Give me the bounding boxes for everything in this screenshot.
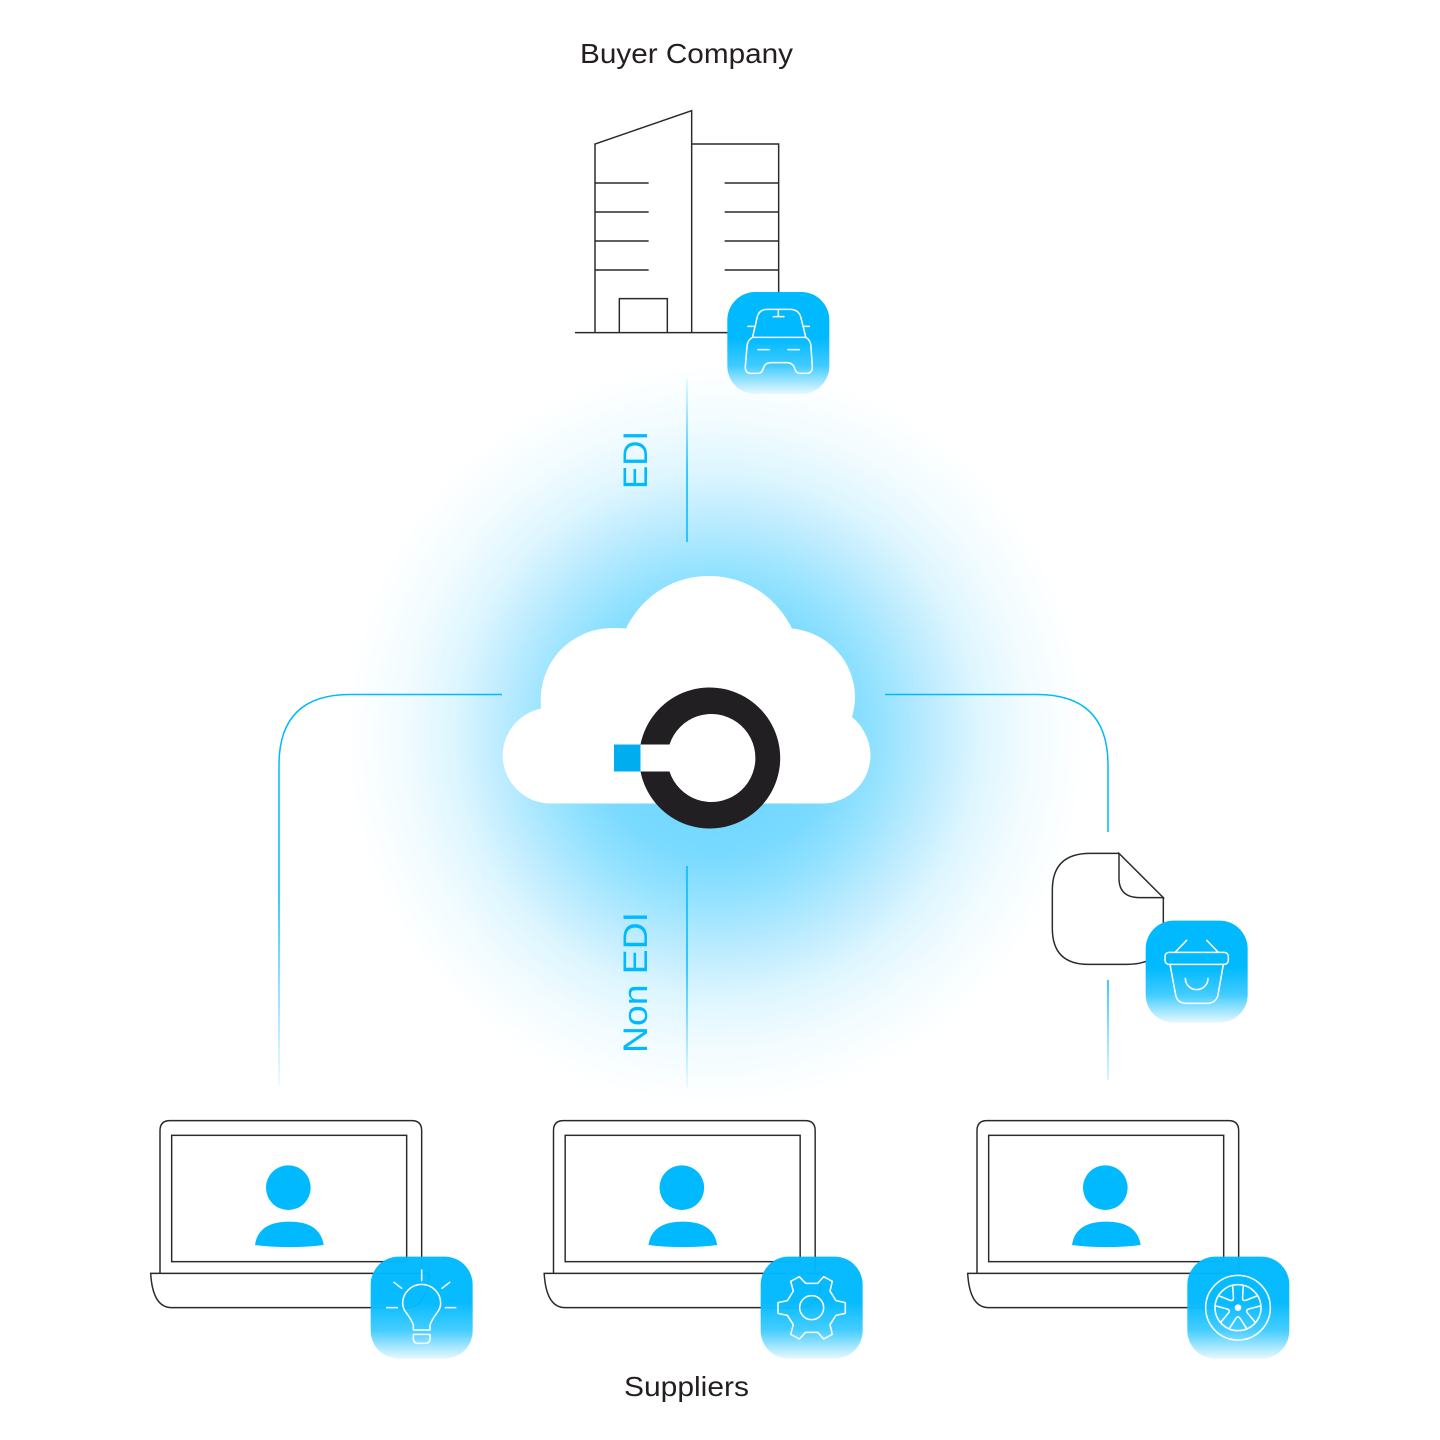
document icon: [1052, 853, 1163, 964]
badge: wheel: [1187, 1257, 1289, 1359]
cloud: [503, 576, 870, 804]
connector: cloud to left supplier: [279, 694, 502, 900]
badge: gear: [761, 1257, 863, 1359]
connector: document to right supplier: [1107, 980, 1109, 1080]
icon: buyer building: [575, 111, 779, 333]
laptop: centre supplier: [544, 1121, 823, 1308]
badge: light bulb: [371, 1257, 473, 1359]
laptop: left supplier: [151, 1121, 429, 1308]
badge: basket: [1146, 921, 1248, 1023]
background glow: [344, 363, 1088, 1107]
title: Buyer Company: Buyer Company: [580, 38, 793, 69]
label: Suppliers: Suppliers: [624, 1371, 749, 1402]
label: EDI: EDI: [617, 431, 655, 489]
connector: cloud to document: [885, 694, 1108, 832]
connector: left line fade: [278, 900, 280, 1086]
laptop: right supplier: [968, 1121, 1246, 1308]
badge: car: [727, 292, 829, 394]
label: Non EDI: Non EDI: [617, 912, 655, 1053]
connector: buyer to cloud: [686, 378, 688, 542]
connector: cloud to centre supplier: [686, 866, 688, 1088]
logo: ring with square: [614, 688, 780, 828]
